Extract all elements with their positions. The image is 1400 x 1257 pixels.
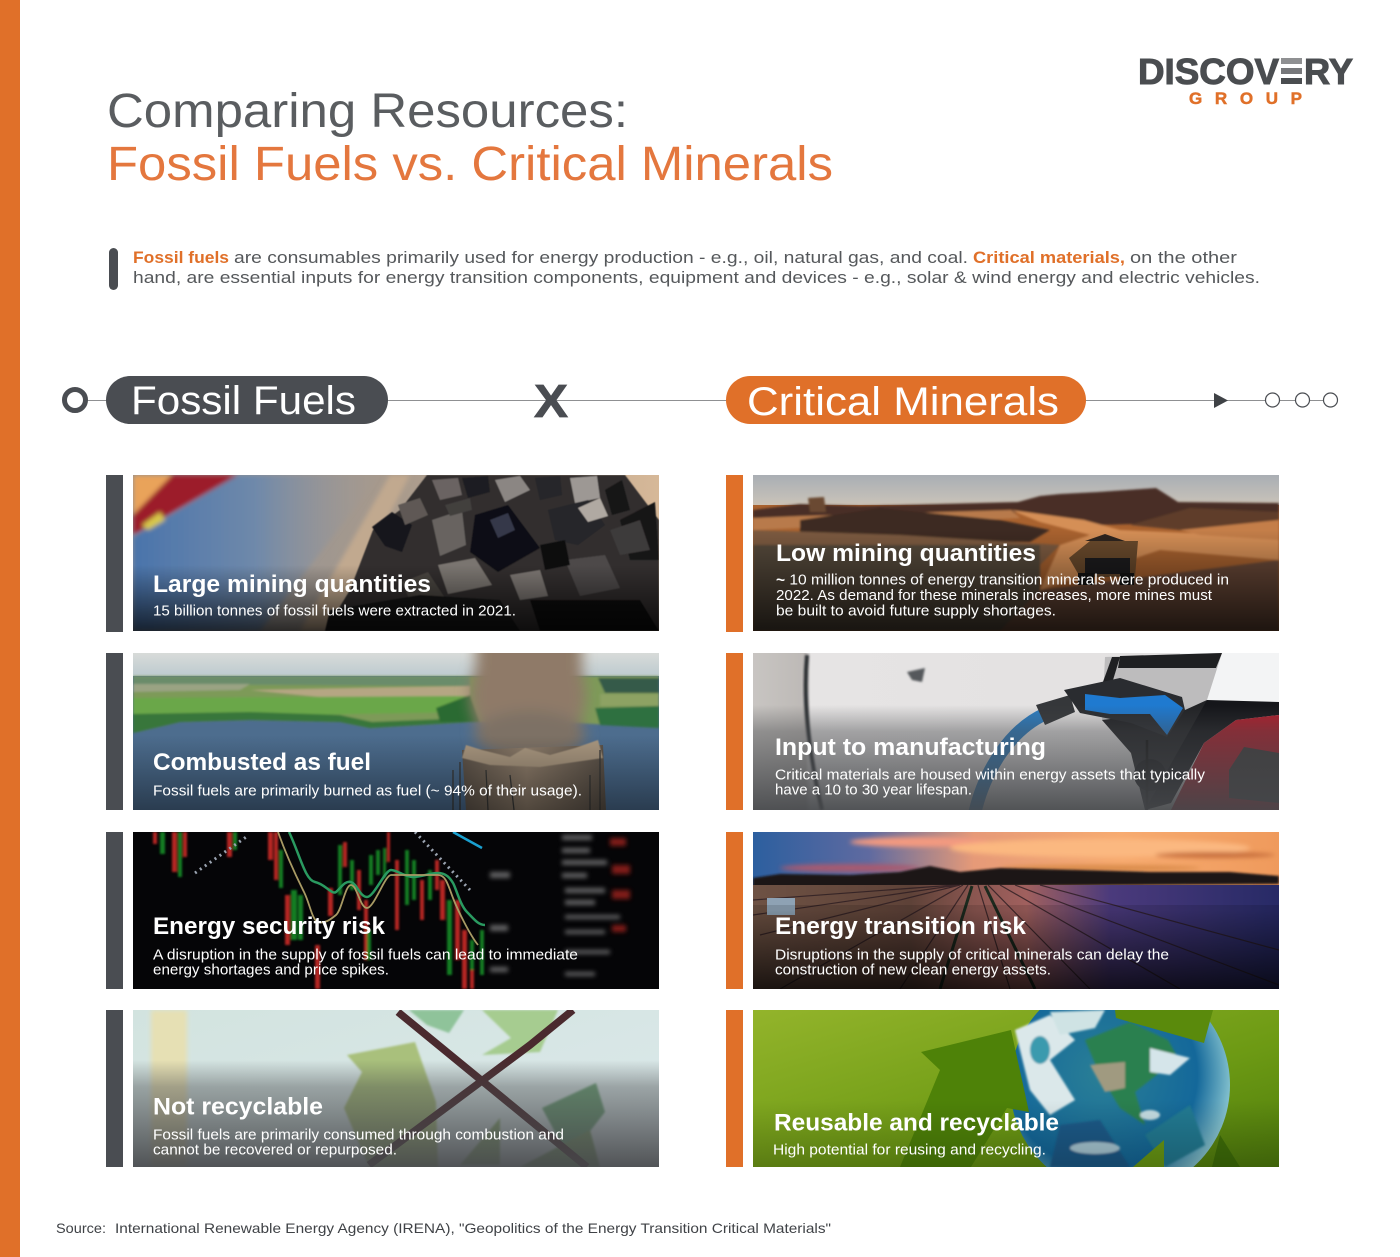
- card description: [153, 1128, 564, 1158]
- comparison timeline line: [86, 400, 1330, 401]
- card description: 15 billion tonnes of fossil fuels were extracted in 2021.: [153, 604, 516, 620]
- heading pill: Critical Minerals: Critical Minerals: [747, 380, 1059, 424]
- panel: Energy security risk: [106, 832, 659, 989]
- intro text: Critical materials,: [973, 248, 1125, 267]
- panel: Not recyclable: [106, 1010, 659, 1167]
- accent bar: [726, 653, 743, 810]
- card title: Low mining quantities: [776, 540, 1036, 567]
- panel: Low mining quantities: [726, 475, 1279, 632]
- accent bar: [726, 832, 743, 989]
- card title: Large mining quantities: [153, 571, 431, 598]
- intro text: [133, 248, 1260, 287]
- heading pill: Fossil Fuels: Fossil Fuels: [131, 379, 356, 423]
- card title: Input to manufacturing: [775, 734, 1046, 761]
- intro text: are consumables primarily used for energy production - e.g., oil, natural gas, and coal.: [234, 248, 968, 267]
- panel: Large mining quantities: [106, 475, 659, 632]
- photo: crossed-out recycling symbol: [133, 1010, 659, 1167]
- panel: Energy transition risk: [726, 832, 1279, 989]
- logo: Discovery Group: GROUP: [1189, 89, 1302, 108]
- card description: [775, 948, 1169, 978]
- intro marker: [109, 248, 118, 290]
- card description: [776, 572, 1229, 620]
- accent bar: [106, 653, 123, 810]
- card description: Critical materials are housed within energy assets that typically: [775, 768, 1206, 784]
- accent bar: [106, 1010, 123, 1167]
- accent bar: [106, 832, 123, 989]
- panel: Input to manufacturing: [726, 653, 1279, 812]
- card title: Reusable and recyclable: [774, 1110, 1059, 1136]
- card description: A disruption in the supply of fossil fuels can lead to immediate: [153, 948, 578, 964]
- source note: Source:: [56, 1220, 106, 1236]
- title: Fossil Fuels vs. Critical Minerals: [107, 138, 833, 191]
- photo: electric vehicle charging: [753, 653, 1279, 812]
- card description: Disruptions in the supply of critical minerals can delay the: [775, 948, 1169, 964]
- title: [107, 85, 833, 191]
- haul truck: [1069, 534, 1138, 585]
- intro text: hand, are essential inputs for energy transition components, equipment and devices - e.g., solar & wind energy and electric vehicles.: [133, 268, 1260, 287]
- logo: Discovery Group: RY: [1304, 51, 1353, 92]
- card description: Fossil fuels are primarily consumed through combustion and: [153, 1128, 564, 1144]
- card title: Combusted as fuel: [153, 749, 371, 776]
- accent bar: [106, 475, 123, 632]
- card title: Not recyclable: [153, 1094, 323, 1120]
- arrowhead: [1214, 393, 1228, 408]
- card title: Energy security risk: [153, 913, 386, 940]
- photo: cooling tower over lake: [133, 653, 659, 810]
- photo: coal on conveyor: [133, 475, 659, 631]
- logo: Discovery Group: DISCOV: [1138, 51, 1279, 92]
- title: Comparing Resources:: [107, 85, 628, 138]
- left accent strip: [0, 0, 20, 1257]
- source note: International Renewable Energy Agency (IRENA), "Geopolitics of the Energy Transition Critical Materials": [115, 1220, 831, 1236]
- card description: [153, 948, 578, 978]
- card description: [775, 768, 1206, 798]
- panel: Combusted as fuel: [106, 653, 659, 810]
- card description: ~ 10 million tonnes of energy transition minerals were produced in: [776, 572, 1229, 588]
- photo: open-pit mine with haul truck: [753, 475, 1279, 631]
- card description: have a 10 to 30 year lifespan.: [775, 782, 972, 798]
- intro text: on the other: [1130, 248, 1237, 267]
- card description: 2022. As demand for these minerals increases, more mines must: [776, 588, 1212, 604]
- card description: energy shortages and price spikes.: [153, 962, 389, 978]
- card title: Energy transition risk: [775, 913, 1027, 940]
- intro text: Fossil fuels: [133, 248, 229, 267]
- start ring: [64, 390, 86, 410]
- accent bar: [726, 475, 743, 632]
- photo: stock market candlestick chart: [133, 832, 659, 989]
- photo: solar farm at sunset: [753, 832, 1279, 989]
- timeline dots: [1266, 393, 1338, 407]
- panel: Reusable and recyclable: [726, 1010, 1279, 1167]
- photo: earth with recycling arrows: [753, 1010, 1279, 1167]
- heading pill: Fossil Fuels: [106, 376, 388, 424]
- card description: be built to avoid future supply shortages.: [776, 604, 1056, 620]
- accent bar: [726, 1010, 743, 1167]
- versus X: X: [534, 375, 568, 427]
- logo: Discovery Group: [1138, 51, 1353, 108]
- card description: High potential for reusing and recycling.: [773, 1142, 1046, 1158]
- card description: construction of new clean energy assets.: [775, 962, 1051, 978]
- card description: cannot be recovered or repurposed.: [153, 1142, 397, 1158]
- card description: Fossil fuels are primarily burned as fuel (~ 94% of their usage).: [153, 784, 582, 800]
